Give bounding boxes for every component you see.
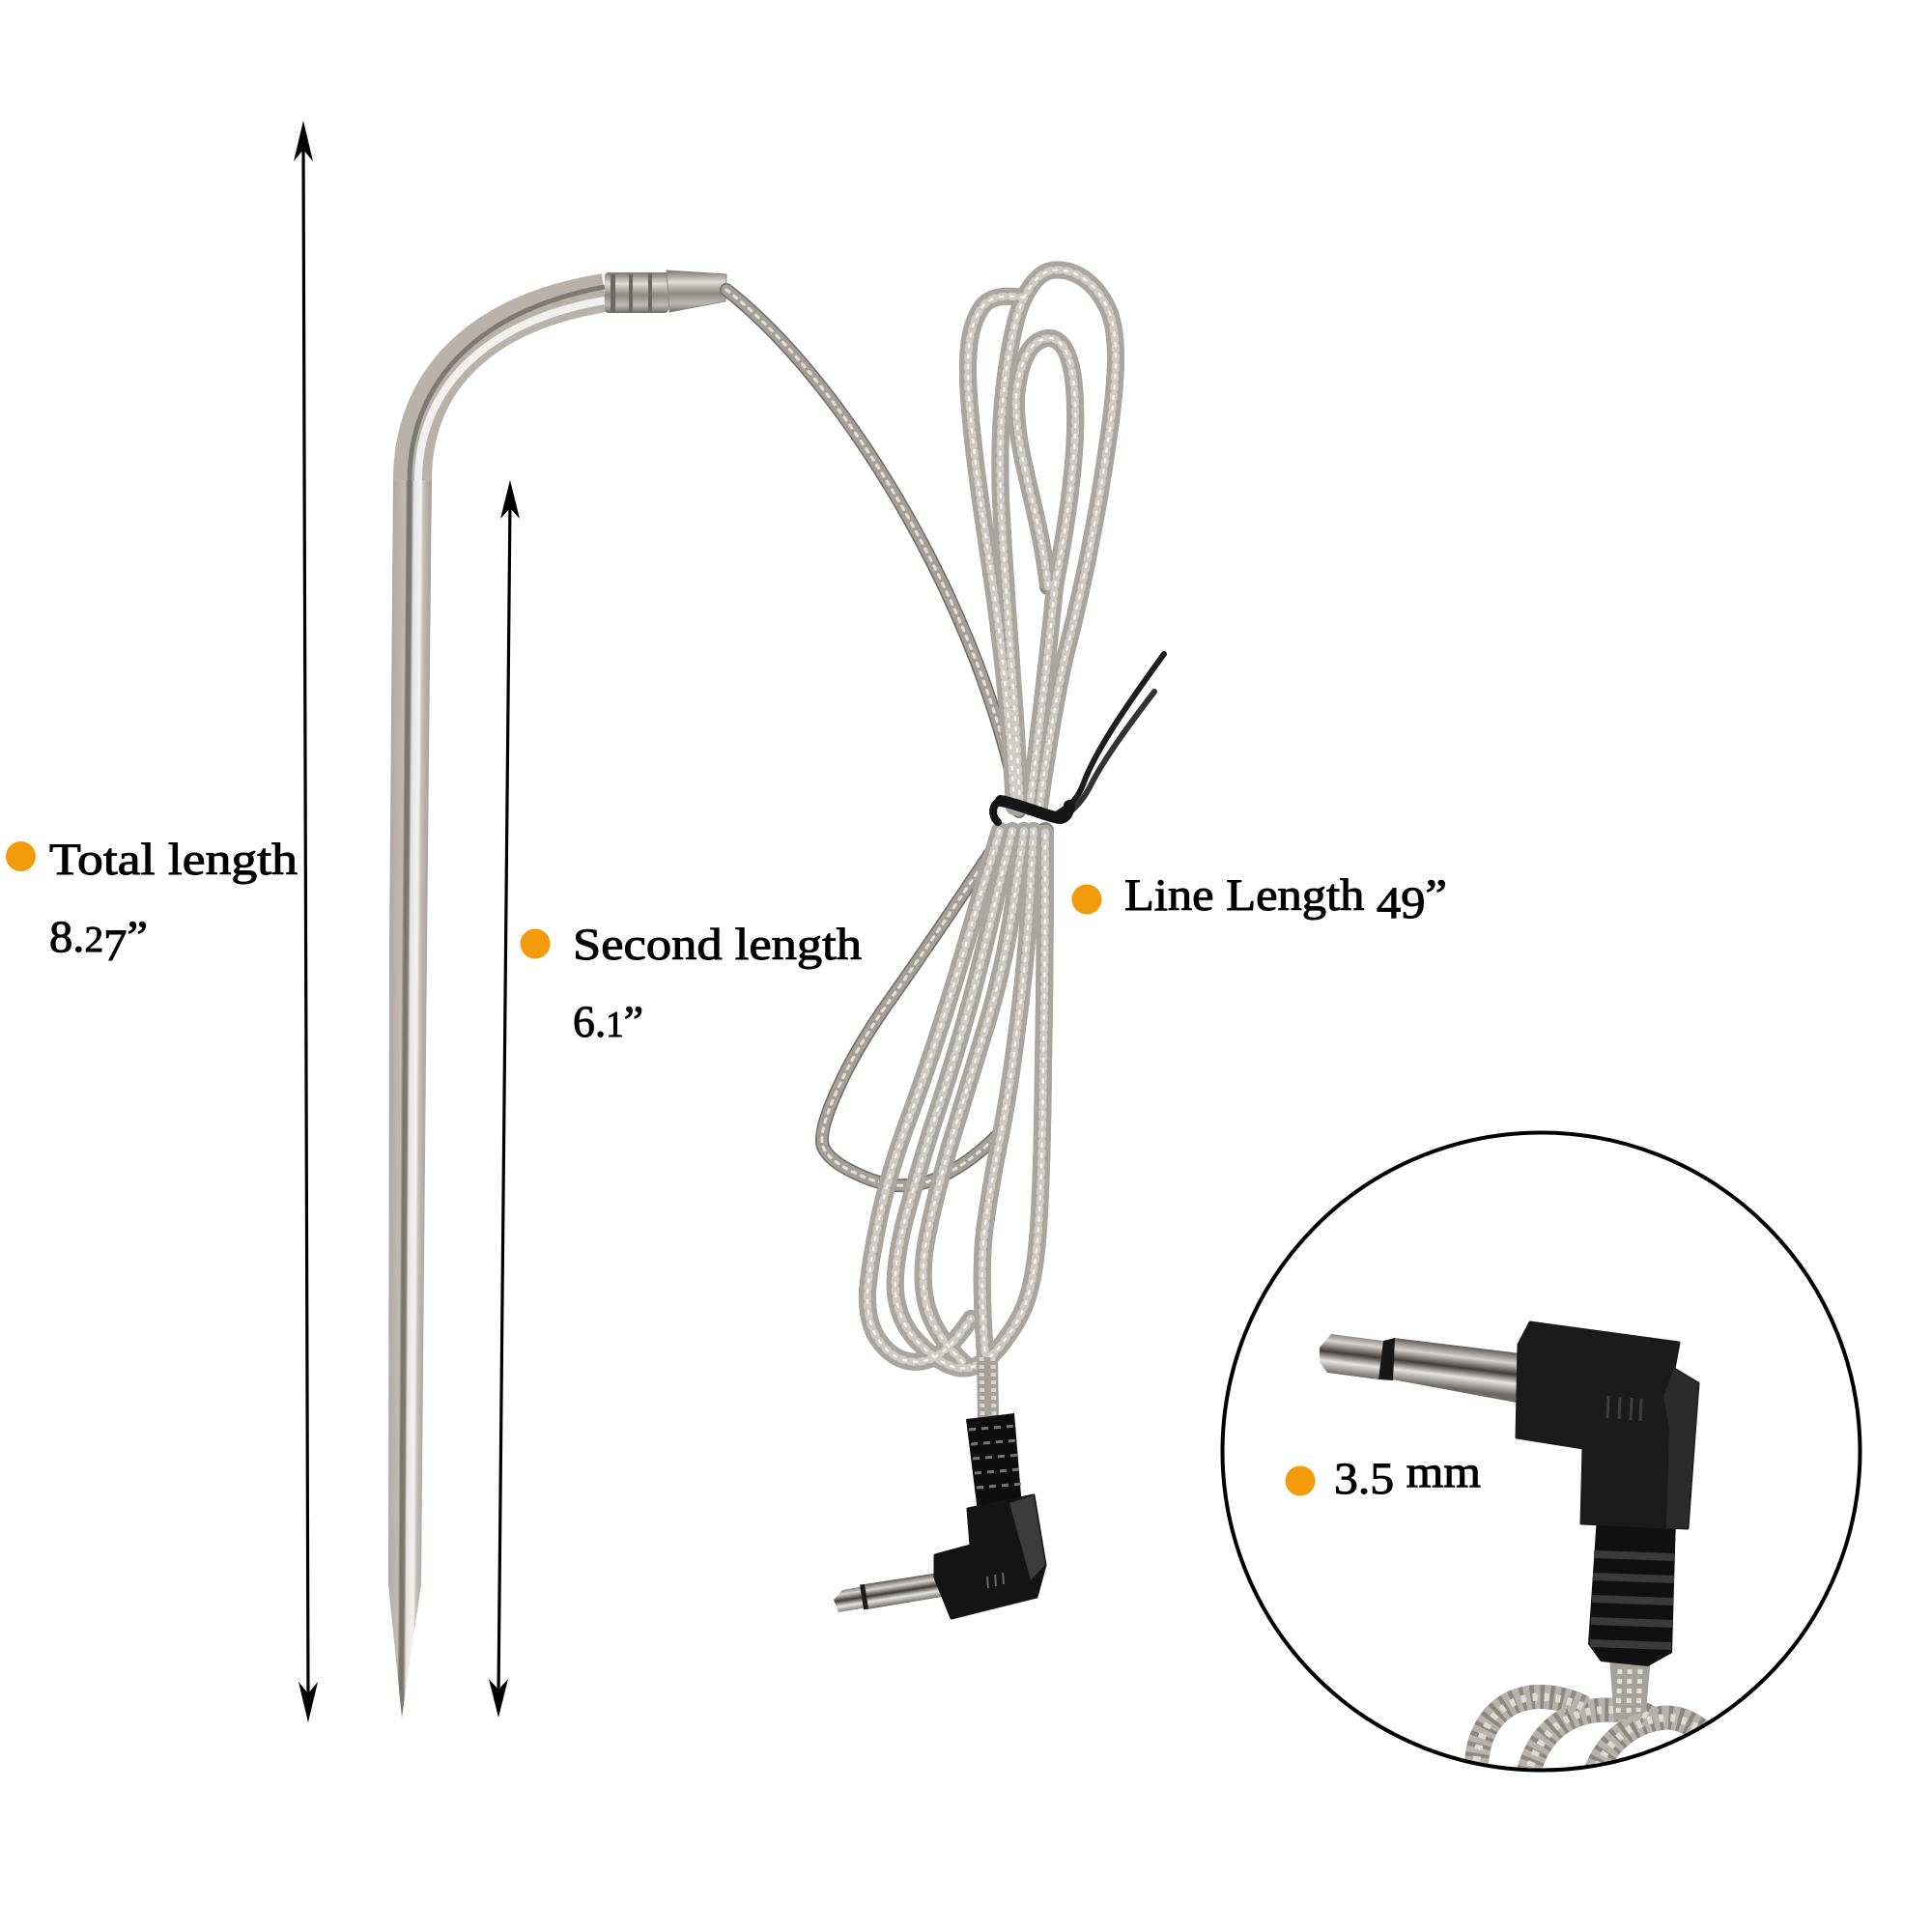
label: 3.5 mm: 3 — [1334, 1454, 1358, 1504]
label: second length: 6.1” — [573, 997, 643, 1047]
circle outline — [1223, 1132, 1861, 1770]
label: line length: Line Length — [1124, 870, 1348, 921]
zoom circle: plug detail — [1223, 1132, 1861, 1777]
label: total length: Total length — [49, 835, 298, 885]
label: 3.5 mm: 5 — [1370, 1454, 1394, 1504]
label: second length: Second length — [573, 920, 862, 970]
label: line length: 49 — [1377, 878, 1426, 928]
metal pin — [1320, 1334, 1520, 1403]
label: line length — [1072, 870, 1447, 928]
plug grip marks — [987, 1573, 1004, 1588]
probe lower shaft and tip — [388, 947, 427, 1718]
label: second length — [520, 920, 862, 1047]
label: line length: ” — [1426, 870, 1447, 921]
braided wire to boot — [1609, 1657, 1651, 1721]
label: 3.5 mm — [1285, 1447, 1481, 1504]
probe ferrule — [605, 270, 726, 313]
plug metal pin — [834, 1573, 942, 1612]
plug body — [1517, 1322, 1698, 1528]
plug side facet — [1663, 1369, 1698, 1528]
arrow: second length dimension — [489, 480, 520, 1718]
illustration: metal probe — [388, 270, 726, 1718]
label: total length: 7 — [103, 921, 127, 971]
cable tie and wire ends — [993, 654, 1164, 822]
ribbed boot — [1588, 1517, 1676, 1666]
plug grip marks — [1607, 1396, 1641, 1421]
probe straight shaft — [389, 476, 432, 948]
label: total length: 8.2 — [49, 912, 102, 962]
cable loops in zoom circle — [1476, 1697, 1710, 1777]
plug body — [935, 1495, 1045, 1618]
probe bend — [410, 287, 605, 480]
label: total length — [6, 835, 298, 971]
label: total length: ” — [127, 912, 148, 962]
arrow: total length dimension — [294, 121, 318, 1722]
illustration: small angled plug — [834, 1413, 1045, 1618]
label: 3.5 mm: . — [1358, 1454, 1370, 1504]
label: 3.5 mm: mm — [1394, 1447, 1481, 1497]
illustration: braided cable — [726, 270, 1116, 1420]
plug ribbed boot — [966, 1413, 1022, 1512]
